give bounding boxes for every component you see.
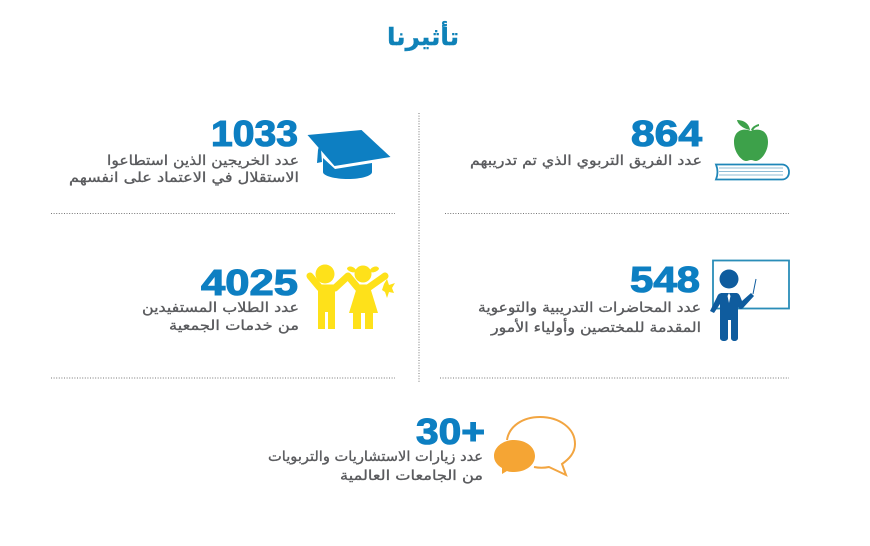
panel: students xyxy=(142,262,395,334)
title: تأثيرنا xyxy=(387,21,459,51)
caption: من الجامعات العالمية xyxy=(340,468,483,484)
number: 1033: 1033 xyxy=(211,113,298,154)
panel: lectures xyxy=(478,259,789,341)
number: 30+: 30+ xyxy=(416,411,485,452)
icon: apple on book xyxy=(716,120,789,180)
icon: teacher at board xyxy=(710,260,789,341)
number: 548: 548 xyxy=(630,259,700,300)
caption xyxy=(268,449,483,484)
panel: visits xyxy=(268,411,575,484)
icon: two children xyxy=(310,264,395,329)
panel: trained educational team xyxy=(470,113,789,180)
caption: عدد الطلاب المستفيدين xyxy=(142,300,299,316)
caption: المقدمة للمختصين وأولياء الأمور xyxy=(490,318,701,336)
number: 864: 864 xyxy=(631,113,702,154)
caption: عدد المحاضرات التدريبية والتوعوية xyxy=(478,300,701,316)
caption xyxy=(478,300,701,336)
caption: عدد الفريق التربوي الذي تم تدريبهم xyxy=(470,153,702,169)
caption: من خدمات الجمعية xyxy=(169,318,299,334)
caption xyxy=(69,153,299,186)
caption xyxy=(142,300,299,334)
caption: عدد الخريجين الذين استطاعوا xyxy=(107,153,299,169)
panel: graduates xyxy=(69,113,390,186)
caption: الاستقلال في الاعتماد على انفسهم xyxy=(69,170,299,186)
icon: graduation cap xyxy=(308,130,390,179)
caption: عدد زيارات الاستشاريات والتربويات xyxy=(268,449,483,465)
number: 4025: 4025 xyxy=(201,262,298,303)
icon: speech bubbles xyxy=(494,417,575,475)
